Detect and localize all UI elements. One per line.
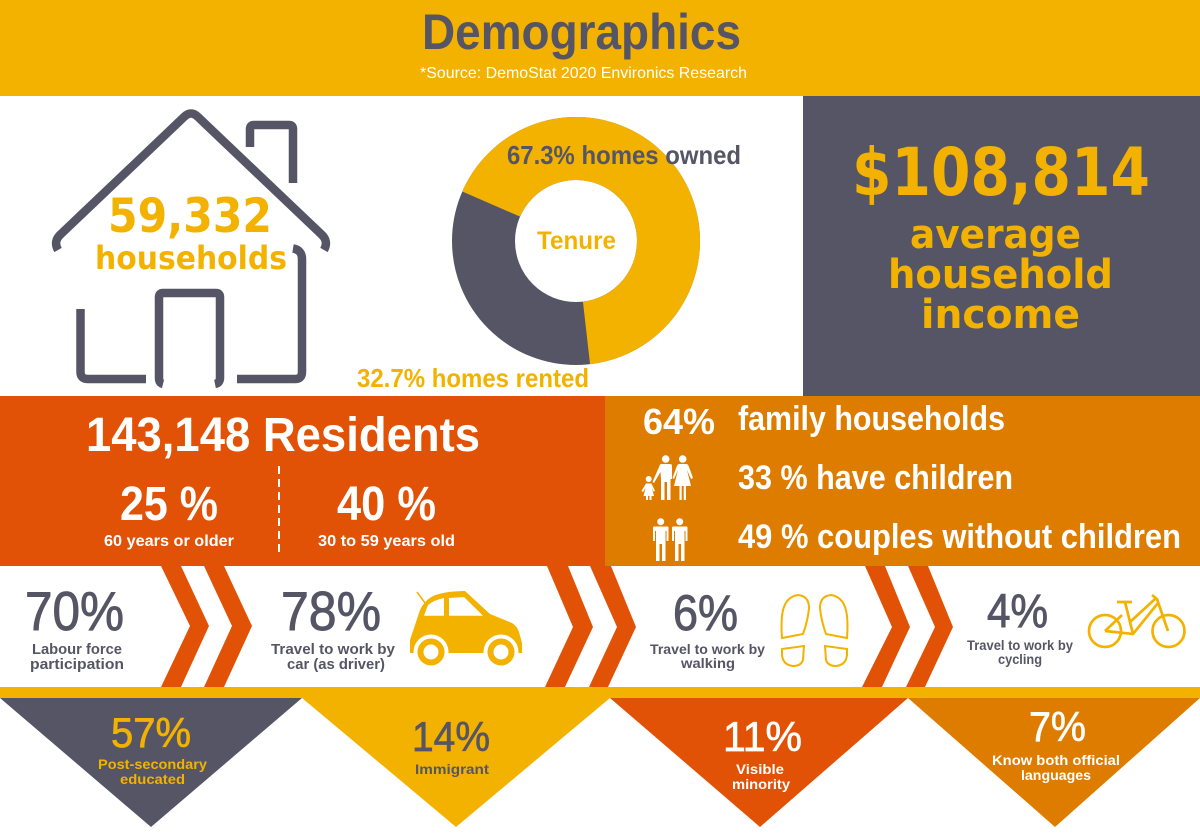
stat: 30 to 59 years old: 30 to 59 years old <box>318 533 455 550</box>
chart: tenure donut <box>357 140 741 393</box>
stat: 60 years or older: 60 years or older <box>104 533 234 550</box>
panel: work and travel strip <box>25 566 1184 687</box>
stat: 11%: 11% <box>723 713 802 760</box>
income label <box>888 212 1113 338</box>
stat: walking: Travel to work by <box>650 641 765 657</box>
panel: immigrant triangle <box>302 698 610 827</box>
label: post-secondary: educated <box>120 771 185 787</box>
panel: residents <box>0 396 605 566</box>
33 % have children label: 33 % have children <box>738 459 1013 497</box>
stat: 60 years or older <box>104 478 234 550</box>
label: official languages: Know both official <box>992 752 1120 768</box>
label: post-secondary <box>98 756 207 787</box>
label: official languages <box>992 752 1120 783</box>
rented label: 32.7% homes rented <box>357 363 589 393</box>
panel: header <box>0 0 1200 96</box>
income value: $108,814 <box>852 134 1150 211</box>
stat: 30 to 59 years old <box>318 478 455 550</box>
family households label: family households <box>738 400 1005 438</box>
panel: education triangle <box>0 698 302 827</box>
panel: visible minority triangle <box>610 698 908 827</box>
stat: walking: 6% <box>673 585 738 641</box>
stat: 64%: 64% <box>643 401 715 442</box>
income label: household <box>888 252 1113 298</box>
panel: official languages triangle <box>908 698 1200 827</box>
stat: 14%: 14% <box>412 713 490 760</box>
income label: average <box>910 212 1081 258</box>
icon: family <box>642 455 693 500</box>
stat: walking: walking <box>680 655 735 671</box>
income label: income <box>921 292 1080 338</box>
donut centre label: Tenure <box>537 227 616 255</box>
stat: labour force: 70% <box>25 580 124 642</box>
stat: 57%: 57% <box>111 709 191 756</box>
label: visible minority: Visible <box>736 761 784 777</box>
households label: households <box>95 239 287 277</box>
label: post-secondary: Post-secondary <box>98 756 207 772</box>
stat: cycling: cycling <box>998 652 1042 667</box>
chevrons: pair 1 <box>161 566 252 687</box>
source note: *Source: DemoStat 2020 Environics Research <box>420 65 747 82</box>
chevrons: pair 2 <box>545 566 636 687</box>
stat: cycling: Travel to work by <box>967 638 1073 653</box>
icon: footprints <box>782 595 848 666</box>
label: visible minority: minority <box>732 776 790 792</box>
stat: 7%: 7% <box>1029 703 1086 750</box>
stat: cycling <box>967 584 1073 667</box>
chevrons: pair 3 <box>862 566 953 687</box>
stat: 30 to 59 years old: 40 % <box>337 478 436 531</box>
residents heading: 143,148 Residents <box>86 409 480 462</box>
stat: car: car (as driver) <box>287 656 385 673</box>
stat: 60 years or older: 25 % <box>120 478 218 531</box>
title: Demographics <box>422 4 741 60</box>
icon: couple <box>653 518 688 561</box>
stat: labour force <box>25 580 124 673</box>
icon: car <box>410 591 522 670</box>
band: yellow divider <box>0 687 1200 698</box>
label: official languages: languages <box>1021 767 1091 783</box>
icon: house <box>56 114 326 384</box>
panel: family households <box>605 396 1200 566</box>
panel: income <box>803 96 1200 396</box>
label: visible minority <box>732 761 790 792</box>
stat: cycling: 4% <box>987 584 1048 637</box>
stat: labour force: participation <box>30 656 124 673</box>
stat: car <box>271 580 396 673</box>
panel: households <box>56 114 326 384</box>
stat: car: 78% <box>281 580 381 642</box>
stat: car: Travel to work by <box>271 641 396 658</box>
label: immigrant: Immigrant <box>415 761 489 777</box>
households count: 59,332 <box>108 189 272 244</box>
stat: labour force: Labour force <box>32 641 122 658</box>
icon: bicycle <box>1089 595 1184 647</box>
stat: walking <box>650 585 765 671</box>
owned label: 67.3% homes owned <box>507 140 741 170</box>
